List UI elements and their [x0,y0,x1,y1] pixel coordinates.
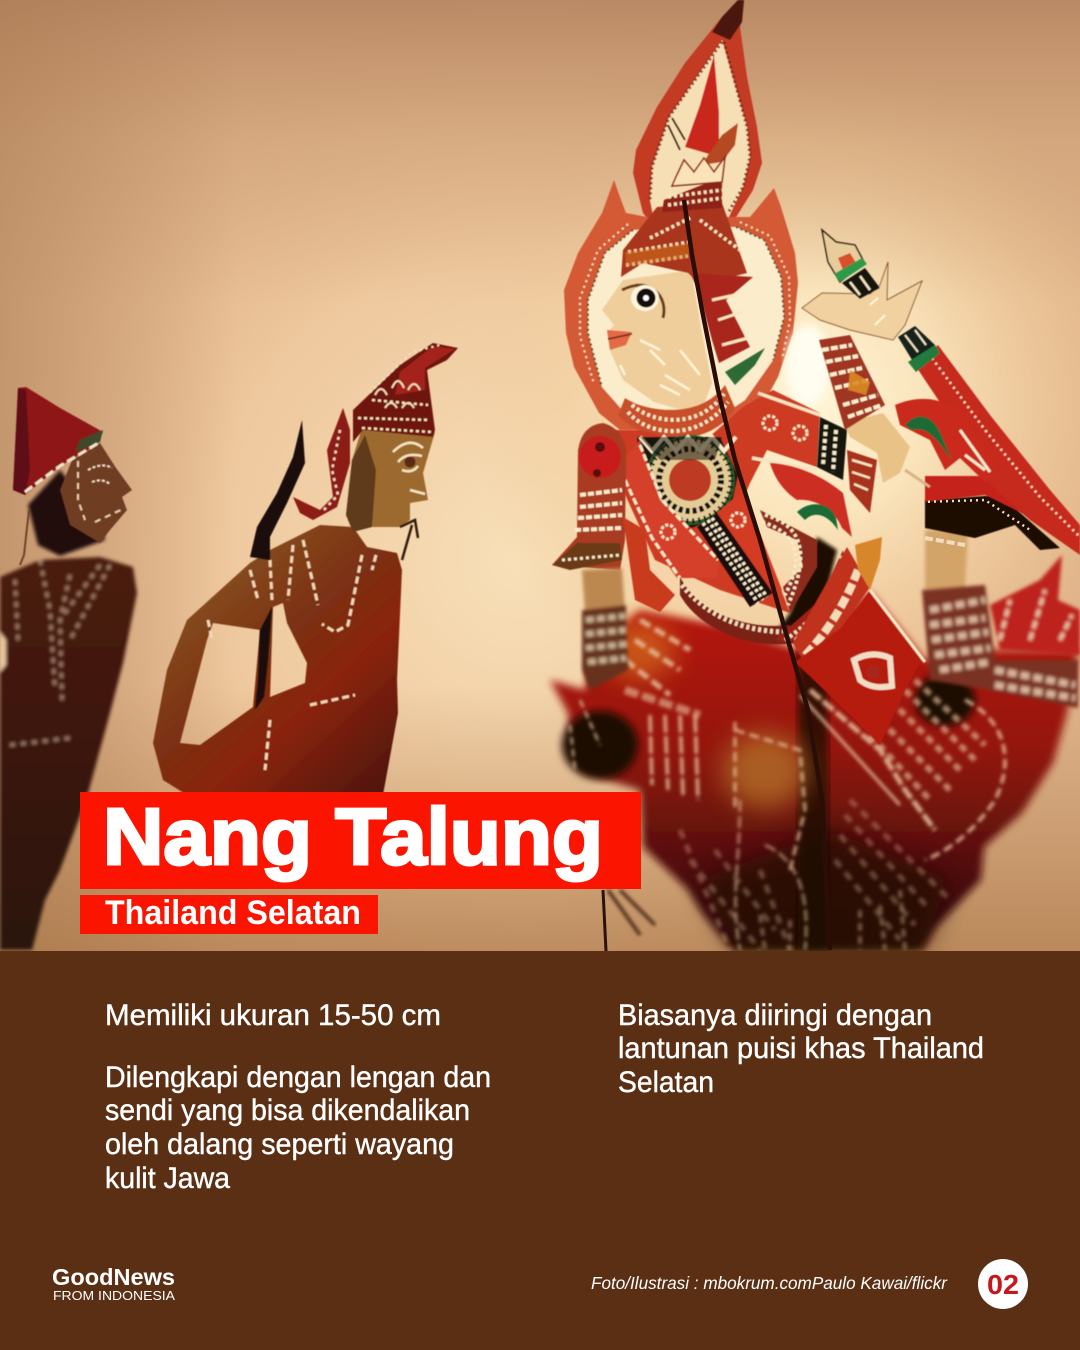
text block: joints: oleh dalang seperti wayang [105,1128,454,1161]
page number badge: 02 [987,1269,1019,1300]
text block: joints: Dilengkapi dengan lengan dan [105,1061,491,1094]
text block: joints [105,1061,491,1195]
center panel [717,490,782,600]
dark shadow patches [562,620,975,951]
sash [623,440,720,578]
body, arm and thigh [153,525,402,795]
text block: joints: sendi yang bisa dikendalikan [105,1094,470,1127]
red torso panels [612,390,820,613]
central control rod [603,200,830,951]
main puppet chest arcs [680,510,870,673]
subtitle text: Thailand Selatan [105,894,361,932]
logo: GoodNews from Indonesia: GoodNews [52,1264,175,1290]
head [13,387,132,565]
beard [28,470,105,556]
main puppet torso and sash [612,390,820,613]
logo: GoodNews from Indonesia [52,1264,176,1303]
main puppet right leg and foot [922,476,1080,708]
body [0,557,137,950]
head and hat [293,343,458,560]
left puppet [0,387,137,950]
text block: joints: kulit Jawa [105,1162,230,1195]
stick [250,420,305,710]
main puppet face and crown [602,157,765,439]
main puppet right upper arm and forearm [817,335,930,513]
page number badge [978,1259,1028,1309]
text block: poetry [618,999,984,1099]
title text: Nang Talung [103,792,603,881]
subtitle bar [80,894,378,934]
text block: poetry: Selatan [618,1066,714,1099]
cut-out dashes [208,540,376,770]
text block: size: Memiliki ukuran 15-50 cm [105,999,441,1032]
text block: poetry: lantunan puisi khas Thailand [618,1032,984,1065]
middle puppet [153,343,458,795]
main puppet crown flame [633,0,762,225]
photo: shadow puppets on a glowing screen [0,0,1080,951]
background glow [0,0,1080,951]
right chest flowers [763,416,777,430]
photo credit: Foto/Ilustrasi : mbokrum.comPaulo Kawai/flickr [591,1273,948,1293]
patterned cut-outs [570,620,1005,950]
logo: GoodNews from Indonesia: FROM INDONESIA [53,1289,176,1303]
collar [618,385,735,439]
main puppet cream gap and skirt triangle [750,463,925,745]
main puppet weapon blade and ornament [895,326,1080,555]
title bar [80,792,641,889]
main puppet halo [564,180,830,430]
hat [13,387,103,495]
main puppet lower body [550,592,1078,951]
main puppet raised hand and mace [802,230,922,340]
info panel background [0,951,1080,1350]
necklace [637,437,738,528]
text block: poetry: Biasanya diiringi dengan [618,999,932,1032]
main puppet left arm [552,423,675,612]
